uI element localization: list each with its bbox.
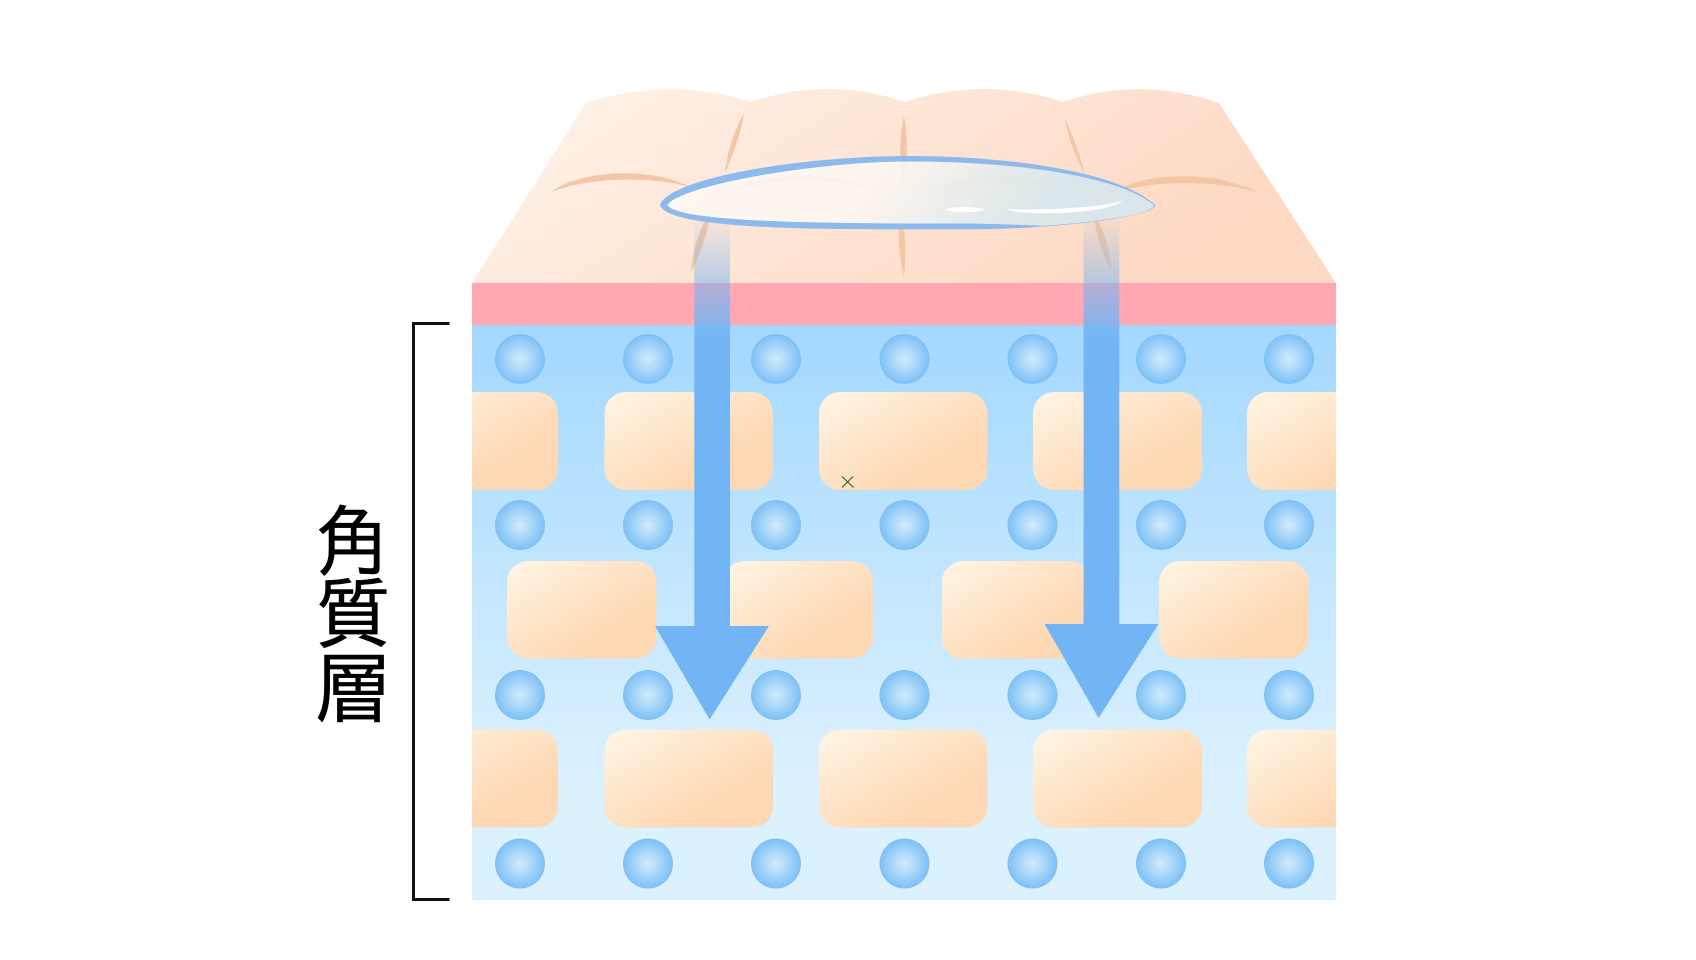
stratum corneum layer xyxy=(472,325,1336,900)
droplet body xyxy=(668,162,1154,226)
bracket for stratum corneum xyxy=(414,324,450,900)
arrow: right penetration xyxy=(1044,215,1158,718)
skin wrinkles xyxy=(551,113,1258,277)
arrow: left penetration xyxy=(655,215,769,720)
keratin cells xyxy=(472,392,1336,828)
droplet highlights xyxy=(945,201,1123,213)
label: 角質層: 角 xyxy=(314,502,392,580)
water droplet xyxy=(660,156,1155,229)
small x mark xyxy=(842,476,854,488)
label: 角質層: 質 xyxy=(314,574,392,652)
pink skin band xyxy=(472,283,1336,325)
skin surface xyxy=(472,89,1336,283)
label: 角質層 xyxy=(314,502,392,726)
skin diagram infographic xyxy=(318,89,1336,901)
label: 角質層: 層 xyxy=(314,648,392,726)
intercellular lipid circles xyxy=(495,334,1314,888)
